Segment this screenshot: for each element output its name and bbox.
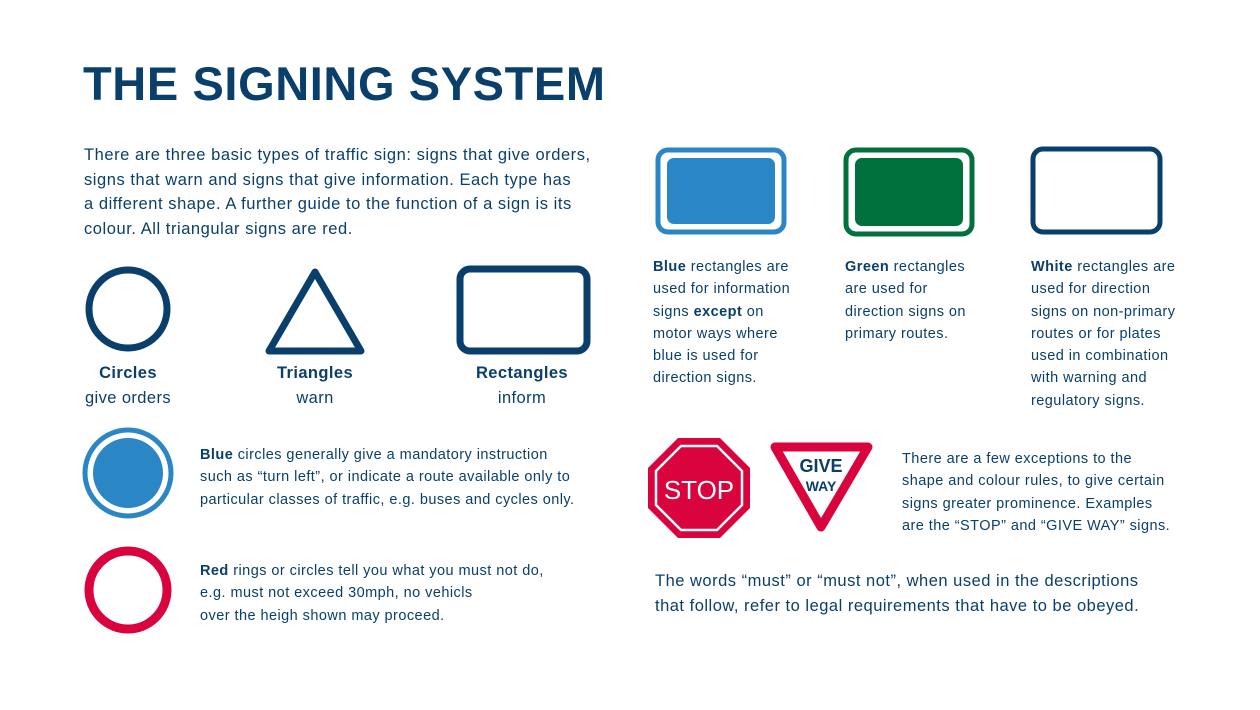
text: blue circles: Blue circles generally give a mandatory instruction — [200, 447, 548, 463]
intro text: a different shape. A further guide to the function of a sign is its — [84, 195, 572, 213]
text: green rectangles: Green rectangles — [845, 259, 965, 275]
text: blue circles: such as “turn left”, or indicate a route available only to — [200, 469, 570, 485]
label: triangles: warn — [296, 389, 334, 407]
text: exceptions — [902, 451, 1170, 534]
text: green rectangles: are used for — [845, 281, 928, 297]
text: blue rectangles: motor ways where — [653, 326, 778, 342]
text: red rings — [200, 563, 544, 624]
text: blue rectangles: used for information — [653, 281, 790, 297]
text: exceptions: shape and colour rules, to give certain — [902, 473, 1165, 489]
text: exceptions: signs greater prominence. Examples — [902, 496, 1153, 512]
text: blue circles: particular classes of traffic, e.g. buses and cycles only. — [200, 492, 575, 508]
text: white rectangles: routes or for plates — [1031, 326, 1161, 342]
text: blue rectangles: blue is used for — [653, 348, 759, 364]
text: white rectangles: regulatory signs. — [1031, 393, 1145, 409]
icon: stop sign — [648, 438, 750, 538]
text: white rectangles: with warning and — [1031, 370, 1147, 386]
text: red rings: Red rings or circles tell you what you must not do, — [200, 563, 544, 579]
text: blue rectangles — [653, 259, 790, 386]
label: circles: give orders — [85, 389, 171, 407]
icon: green rectangle — [846, 150, 972, 234]
text: exceptions: There are a few exceptions to the — [902, 451, 1132, 467]
text: blue circles — [200, 447, 575, 508]
intro text: colour. All triangular signs are red. — [84, 220, 353, 238]
icon: blue circle — [85, 430, 171, 516]
text: blue rectangles: Blue rectangles are — [653, 259, 789, 275]
text: green rectangles: direction signs on — [845, 304, 966, 320]
icon: rectangle — [460, 269, 587, 351]
intro text: signs that warn and signs that give information. Each type has — [84, 170, 571, 188]
icon: white rectangle — [1033, 149, 1160, 232]
label: rectangles: Rectangles — [476, 364, 568, 382]
text: white rectangles: White rectangles are — [1031, 259, 1175, 275]
label: rectangles — [476, 364, 568, 407]
text: white rectangles: used in combination — [1031, 348, 1169, 364]
text: red rings: e.g. must not exceed 30mph, no vehicls — [200, 585, 473, 601]
intro text — [84, 146, 591, 238]
text: red rings: over the heigh shown may proceed. — [200, 608, 445, 624]
icon: give way sign: WAY — [806, 478, 837, 494]
text: green rectangles: primary routes. — [845, 326, 948, 342]
text: exceptions: are the “STOP” and “GIVE WAY” signs. — [902, 518, 1170, 534]
text: legal note — [655, 572, 1139, 615]
title: THE SIGNING SYSTEM — [83, 57, 606, 110]
text: white rectangles: signs on non-primary — [1031, 304, 1175, 320]
label: rectangles: inform — [498, 389, 546, 407]
icon: stop sign: STOP — [664, 475, 734, 505]
text: blue rectangles: signs except on — [653, 304, 764, 320]
text: white rectangles: used for direction — [1031, 281, 1150, 297]
label: triangles — [277, 364, 353, 407]
intro text: There are three basic types of traffic sign: signs that give orders, — [84, 146, 591, 164]
text: blue rectangles: direction signs. — [653, 370, 757, 386]
icon: red ring — [89, 551, 167, 629]
text: legal note: The words “must” or “must not”, when used in the descriptions — [655, 572, 1139, 590]
icon: give way sign — [775, 447, 868, 527]
label: circles — [85, 364, 171, 407]
icon: circle — [89, 270, 167, 348]
icon: triangle — [269, 272, 361, 351]
text: legal note: that follow, refer to legal requirements that have to be obeyed. — [655, 597, 1139, 615]
label: triangles: Triangles — [277, 364, 353, 382]
label: circles: Circles — [99, 364, 157, 382]
icon: give way sign: GIVE — [799, 456, 843, 476]
text: green rectangles — [845, 259, 966, 342]
icon: blue rectangle — [658, 150, 784, 232]
text: white rectangles — [1031, 259, 1175, 409]
